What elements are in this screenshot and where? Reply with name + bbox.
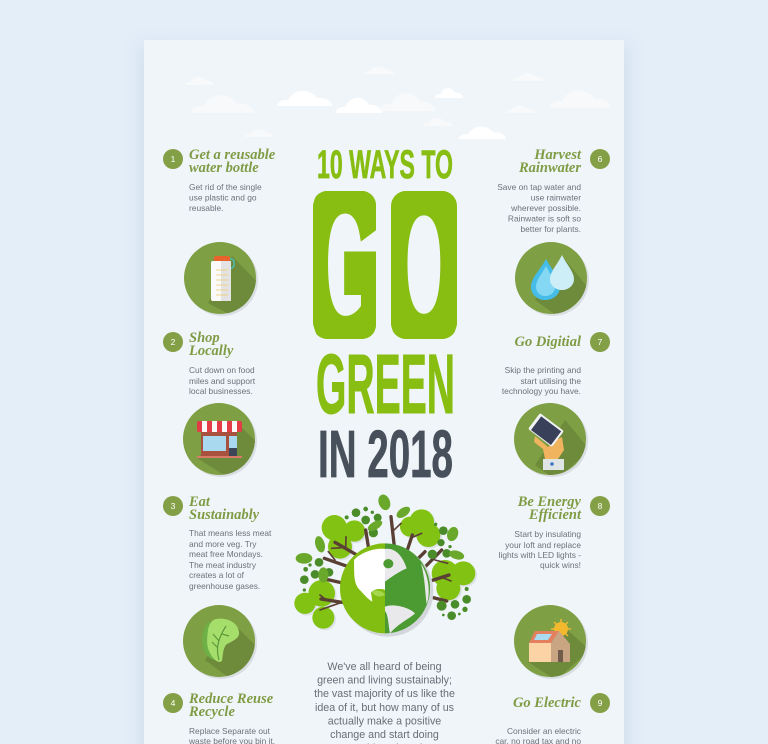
description 7: start utilising the	[520, 376, 581, 386]
description 9	[495, 726, 581, 744]
intro paragraph: idea of it, but how many of us	[315, 702, 454, 714]
icon: solar house	[514, 605, 590, 680]
globe left half	[340, 543, 385, 633]
heading 6: Rainwater	[518, 160, 581, 176]
description 9: Consider an electric	[507, 726, 581, 736]
globe	[340, 543, 433, 637]
title line: in 2018: IN 2018	[318, 417, 453, 492]
number badge 6	[590, 149, 610, 169]
description 7: Skip the printing and	[505, 365, 581, 375]
step 7: go digital	[502, 332, 610, 480]
description 6: wherever possible.	[510, 203, 581, 213]
icon: bottle	[184, 242, 258, 316]
heading 4: Reduce Reuse	[188, 691, 274, 707]
icon: phone in hand	[514, 403, 590, 480]
tree foliage	[294, 509, 475, 629]
description 1	[189, 182, 262, 213]
step 2: shop locally	[163, 332, 257, 477]
description 6: use rainwater	[531, 192, 581, 202]
heading 1: water bottle	[189, 160, 259, 176]
description 1: reusable.	[189, 203, 223, 213]
number badge 8	[590, 496, 610, 516]
description 8: Start by insulating	[514, 529, 581, 539]
description 7	[502, 365, 581, 396]
tree branches	[320, 517, 451, 610]
continent: north america east	[385, 549, 407, 582]
text: GREEN	[316, 337, 455, 431]
description 2: local businesses.	[189, 386, 253, 396]
description 4: Replace Separate out	[189, 726, 271, 736]
heading 3	[188, 494, 260, 523]
step 9: go electric	[495, 693, 610, 744]
description 8: quick wins!	[540, 560, 581, 570]
heading 9: Go Electric	[513, 695, 582, 711]
heading 2: Locally	[188, 343, 234, 359]
heading 4: Recycle	[188, 704, 235, 720]
title line: 10 ways to: 10 WAYS TO	[317, 143, 453, 187]
description 2: Cut down on food	[189, 365, 255, 375]
title letter: O: O	[384, 127, 464, 404]
description 6: better for plants.	[520, 224, 581, 234]
number badge 1: 1	[171, 154, 176, 164]
number badge 1	[163, 149, 183, 169]
number badge 3: 3	[171, 501, 176, 511]
heading 2: Shop	[189, 330, 220, 346]
description 3: The meat industry	[189, 560, 257, 570]
description 6: Rainwater is soft so	[508, 214, 581, 224]
description 3: greenhouse gases.	[189, 581, 260, 591]
description 7: technology you have.	[502, 386, 581, 396]
number badge 7: 7	[598, 337, 603, 347]
intro paragraph: We've all heard of being	[327, 661, 442, 673]
panel shadow	[140, 44, 628, 744]
step 1: reusable bottle	[163, 147, 276, 320]
heading 4	[188, 691, 274, 720]
number badge 8: 8	[598, 501, 603, 511]
number badge 6: 6	[598, 154, 603, 164]
illustration: globe with trees	[294, 493, 477, 630]
icon: lettuce	[183, 605, 257, 679]
intro paragraph: the vast majority of us like the	[314, 688, 455, 700]
intro paragraph: change and start doing	[330, 729, 439, 741]
foliage halo	[296, 511, 477, 630]
heading 8: Be Energy	[517, 494, 582, 510]
number badge 2: 2	[171, 337, 176, 347]
description 2	[189, 365, 256, 396]
description 3: meat free Mondays.	[189, 549, 263, 559]
description 8	[499, 529, 581, 570]
description 3	[189, 528, 272, 591]
gulf island	[372, 590, 385, 596]
heading 1	[189, 147, 276, 176]
step 4: reduce reuse recycle	[163, 691, 275, 744]
title	[313, 150, 457, 478]
heading 8	[517, 494, 582, 523]
single leaves	[296, 493, 465, 583]
globe right half	[385, 543, 430, 633]
panel: poster	[144, 40, 624, 744]
icon: water drops	[515, 242, 590, 318]
number badge 3	[163, 496, 183, 516]
heading 6	[518, 147, 582, 176]
number badge 2	[163, 332, 183, 352]
title letter: G: G	[306, 127, 384, 404]
description 3: creates a lot of	[189, 570, 245, 580]
step 8: energy efficient	[499, 494, 610, 680]
description 3: That means less meat	[189, 528, 272, 538]
number badge 9: 9	[598, 698, 603, 708]
continent: north america west	[354, 549, 385, 602]
intro paragraph	[314, 661, 455, 744]
heading 3: Sustainably	[189, 507, 260, 523]
step 6: harvest rainwater	[497, 147, 610, 318]
heading 2	[188, 330, 234, 359]
description 4	[188, 726, 275, 744]
description 6	[497, 182, 581, 234]
number badge 7	[590, 332, 610, 352]
number badge 4: 4	[171, 698, 176, 708]
description 8: your loft and replace	[505, 540, 581, 550]
intro paragraph: green and living sustainably;	[317, 674, 452, 686]
description 3: and more veg. Try	[189, 539, 257, 549]
heading 8: Efficient	[528, 507, 582, 523]
description 8: lights with LED lights -	[499, 550, 581, 560]
atlantic rim	[421, 563, 429, 604]
globe shadow	[343, 546, 433, 637]
step 3: eat sustainably	[163, 494, 272, 680]
clouds	[185, 66, 611, 139]
lake patch	[383, 559, 393, 568]
heading 3: Eat	[188, 494, 211, 510]
description 1: Get rid of the single	[189, 182, 262, 192]
continent: south america	[385, 605, 415, 633]
heading 6: Harvest	[533, 147, 582, 163]
description 6: Save on tap water and	[497, 182, 581, 192]
heading 7: Go Digitial	[515, 334, 581, 350]
dark leaves and berries	[300, 507, 471, 620]
icon: shop	[183, 403, 257, 477]
description 1: use plastic and go	[189, 192, 257, 202]
heading 1: Get a reusable	[189, 147, 276, 163]
description 2: miles and support	[189, 376, 256, 386]
intro paragraph: actually make a positive	[328, 716, 441, 728]
